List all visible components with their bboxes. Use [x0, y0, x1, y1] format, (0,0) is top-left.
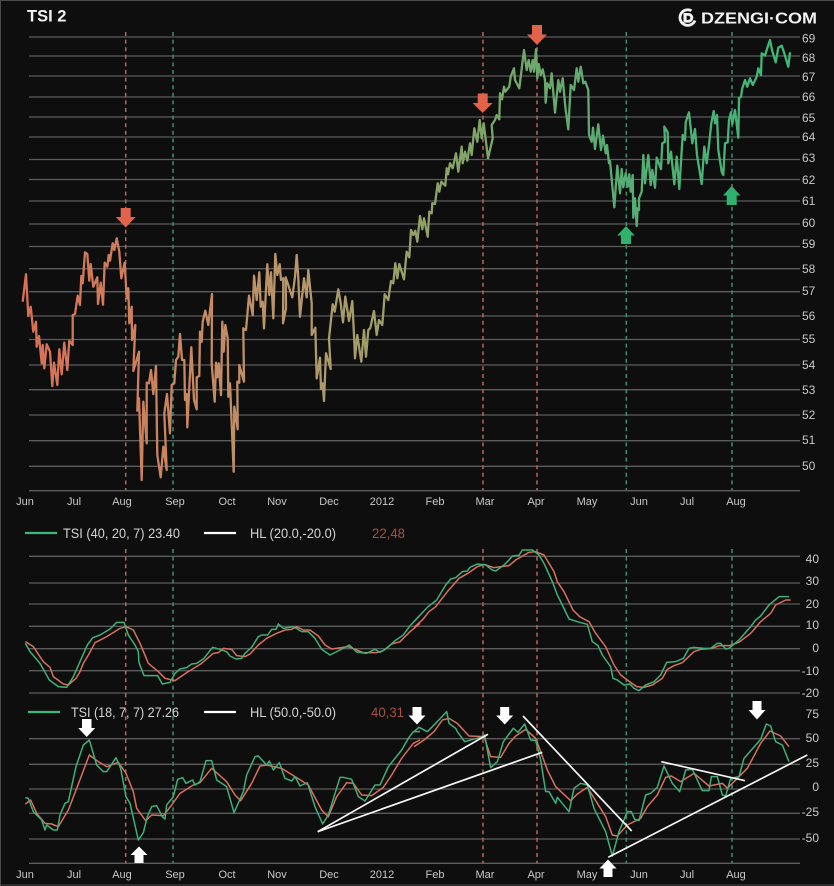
arrow: sell 2 [473, 94, 493, 113]
axis: price y labels: 54 [802, 358, 816, 372]
axis: bottom months: Jul [67, 869, 81, 881]
axis: bottom months: 2012 [370, 869, 394, 881]
arrow: up at Aug [130, 846, 148, 863]
axis: TSI 18 y labels: 50 [806, 731, 819, 745]
axis: top months: Dec [319, 496, 339, 508]
axis: price y labels: 55 [802, 332, 816, 346]
axis: price y labels: 63 [802, 151, 816, 165]
axis: top months: Jun [16, 496, 34, 508]
legend: TSI 40 20 7: HL (20.0,-20.0) [250, 526, 336, 541]
arrow: down at Feb [408, 707, 426, 724]
legend: TSI 40 20 7 [25, 526, 405, 541]
axis: top months: Sep [165, 496, 185, 508]
axis: bottom months: Mar [476, 869, 495, 881]
legend: TSI 40 20 7: TSI (40, 20, 7) 23.40 [63, 526, 180, 541]
axis: TSI 40 y labels: 30 [806, 574, 819, 588]
axis: price y labels: 51 [802, 433, 816, 447]
arrow: buy 1 [617, 226, 635, 244]
axis: top months: Feb [426, 496, 444, 508]
axis: TSI 40 y labels: 40 [806, 552, 819, 566]
axis: top months: Nov [267, 496, 287, 508]
axis: top months [16, 496, 746, 508]
arrow: buy 2 [723, 186, 740, 205]
chart: TSI 18 7 7 lines [25, 712, 789, 856]
axis: bottom months: Jun [16, 869, 34, 881]
axis: TSI 18 y labels: 25 [806, 756, 819, 770]
icon: logo mark [680, 10, 695, 25]
axis: bottom months: Apr [527, 869, 545, 881]
axis: TSI 40 y labels: 20 [806, 597, 819, 611]
axis: bottom months: Aug [726, 869, 746, 881]
axis: price y labels: 61 [802, 194, 816, 208]
axis: price y labels: 64 [802, 130, 816, 144]
axis: TSI 18 y labels [802, 707, 819, 845]
axis: TSI 18 y labels: -25 [802, 805, 819, 819]
legend: TSI 18 7 7: HL (50.0,-50.0) [250, 705, 336, 720]
arrow: down at Jul [78, 719, 95, 737]
axis: bottom months: Feb [426, 869, 444, 881]
axis: TSI 40 y labels: -10 [802, 664, 819, 678]
axis: bottom months: May [577, 869, 598, 881]
axis: TSI 40 y labels: -20 [802, 686, 819, 700]
axis: price y labels: 68 [802, 51, 816, 65]
axis: bottom months [16, 869, 746, 881]
arrow: up at May [600, 860, 616, 877]
axis: top months: Oct [218, 496, 236, 508]
axis: price y labels: 59 [802, 237, 816, 251]
legend: TSI 40 20 7: 22,48 [372, 526, 405, 541]
axis: bottom months: Sep [165, 869, 185, 881]
chart: TSI 40 20 7 lines [25, 550, 791, 691]
axis: price y labels: 53 [802, 383, 816, 397]
axis: price y labels: 56 [802, 309, 816, 323]
axis: top months: Jun [630, 496, 648, 508]
axis: bottom months: Aug [112, 869, 132, 881]
axis: top months: Aug [726, 496, 746, 508]
axis: top months: Mar [476, 496, 495, 508]
axis: bottom months: Oct [218, 869, 236, 881]
axis: price y labels: 58 [802, 262, 816, 276]
axis: bottom months: Nov [267, 869, 287, 881]
axis: price y labels: 67 [802, 70, 816, 84]
axis: price y labels: 62 [802, 173, 816, 187]
title: TSI 2 [27, 8, 66, 26]
axis: bottom months: Jun [630, 869, 648, 881]
logo: dzengi.com [680, 10, 817, 28]
white arrows on TSI 18 [78, 701, 765, 877]
arrow: down at Aug [748, 701, 766, 720]
axis: bottom months: Jul [680, 869, 694, 881]
signal lines: dashed verticals [126, 32, 732, 863]
axis: top months: Aug [112, 496, 132, 508]
axis: price y labels: 69 [802, 32, 816, 46]
axis: TSI 40 y labels: 0 [812, 641, 819, 655]
axis: top months: May [577, 496, 598, 508]
trend lines [318, 716, 807, 857]
legend: TSI 18 7 7 [28, 705, 404, 720]
axis: TSI 18 y labels: -50 [802, 831, 819, 845]
axis: price y labels: 65 [802, 111, 816, 125]
arrow: sell 3 [527, 25, 547, 45]
axis: top months: Jul [680, 496, 694, 508]
axis: TSI 18 y labels: 75 [806, 707, 819, 721]
axis: top months: Apr [527, 496, 545, 508]
legend: TSI 18 7 7: TSI (18, 7, 7) 27.26 [71, 705, 179, 720]
axis: price y labels [802, 32, 816, 473]
axis: price y labels: 50 [802, 459, 816, 473]
arrow: sell 1 [116, 208, 136, 228]
axis: price y labels: 60 [802, 216, 816, 230]
axis: TSI 40 y labels [802, 552, 819, 700]
arrow: down at Mar [496, 707, 513, 724]
logo wordmark: DZENGI·COM [701, 10, 817, 28]
axis: price y labels: 52 [802, 408, 816, 422]
axis: TSI 40 y labels: 10 [806, 618, 819, 632]
legend: TSI 18 7 7: 40,31 [371, 705, 404, 720]
axis: price y labels: 57 [802, 284, 816, 298]
axis: price y labels: 66 [802, 90, 816, 104]
axis: TSI 18 y labels: 0 [812, 780, 819, 794]
price chart line [23, 40, 790, 480]
axis: bottom months: Dec [319, 869, 339, 881]
axis: top months: 2012 [370, 496, 394, 508]
price arrows: sell and buy signals [116, 25, 740, 244]
axis: top months: Jul [67, 496, 81, 508]
